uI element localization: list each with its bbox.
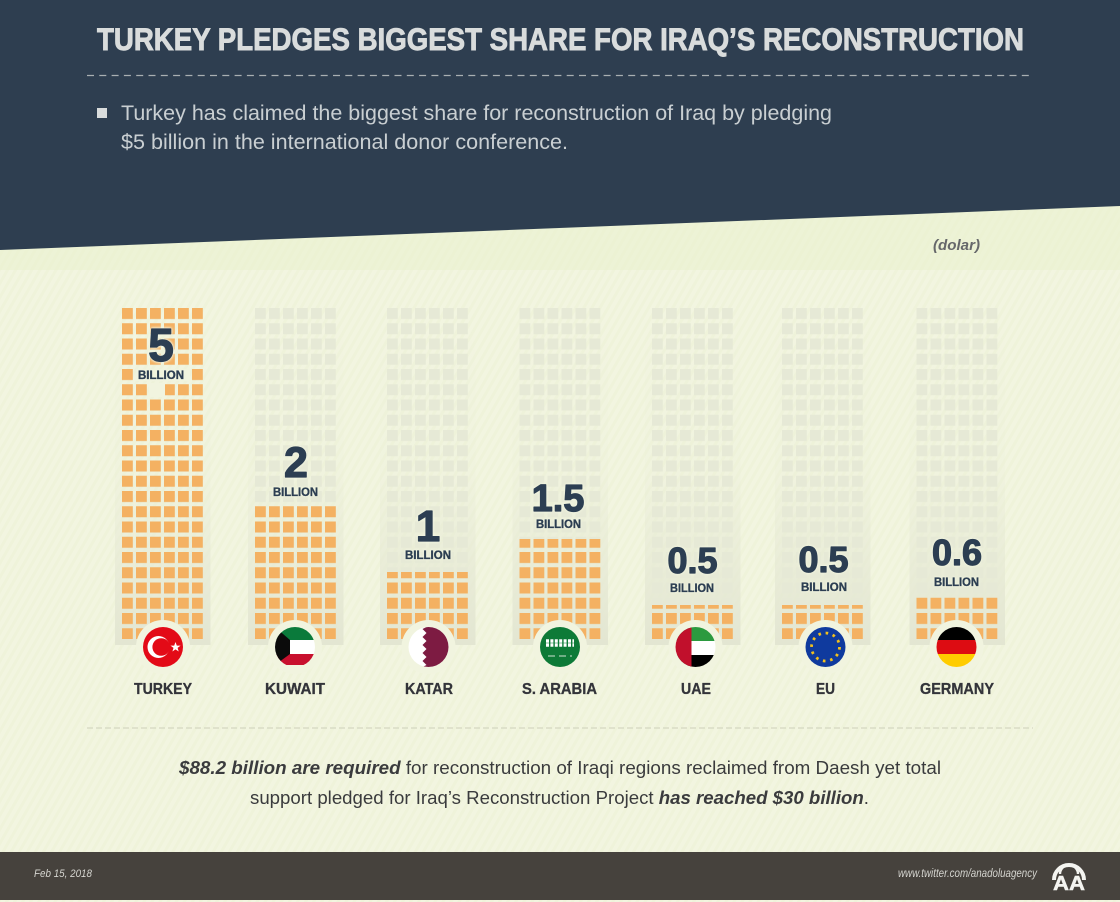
value: 0.6 — [932, 532, 982, 573]
bar: S. Arabia — [512, 296, 608, 645]
icon: EU flag — [798, 620, 852, 674]
summary text — [178, 758, 941, 808]
summary line 1: $88.2 billion are required for reconstruction of Iraqi regions reclaimed from Daesh yet total — [178, 758, 941, 778]
summary line 2: support pledged for Iraq’s Reconstruction Project has reached $30 billion . — [250, 788, 869, 808]
unit: BILLION — [536, 519, 581, 531]
label: Turkey: TURKEY — [134, 681, 193, 698]
icon: Germany flag — [930, 620, 984, 667]
icon: Anadolu Agency logo: AA — [1053, 873, 1085, 895]
bar: UAE — [645, 296, 740, 645]
value: 1 — [416, 502, 440, 551]
value: 0.5 — [667, 540, 718, 581]
label: Germany: GERMANY — [920, 681, 995, 698]
intro line 1: Turkey has claimed the biggest share for reconstruction of Iraq by pledging — [121, 102, 832, 125]
icon: Kuwait flag — [268, 620, 322, 665]
header band — [0, 0, 1120, 250]
footer bar — [0, 852, 1120, 900]
icon: Saudi Arabia flag — [533, 620, 587, 674]
bar: Kuwait — [248, 296, 344, 645]
bullet — [97, 108, 107, 118]
value: 0.5 — [798, 539, 849, 580]
unit: BILLION — [138, 370, 184, 382]
value: 2 — [284, 439, 308, 487]
unit note: (dolar) — [933, 237, 980, 254]
footer date: Feb 15, 2018 — [34, 868, 93, 880]
intro text — [97, 102, 832, 154]
bar: Germany — [910, 296, 1005, 645]
label: UAE: UAE — [681, 681, 711, 698]
icon: Katar flag — [402, 620, 456, 667]
label: EU: EU — [816, 681, 835, 698]
intro line 2: $5 billion in the international donor conference. — [121, 131, 568, 154]
label: Katar: KATAR — [405, 681, 453, 698]
unit: BILLION — [405, 550, 451, 562]
unit: BILLION — [273, 487, 318, 499]
bar: Katar — [380, 296, 476, 645]
bar: Turkey — [115, 296, 210, 645]
label: Kuwait: KUWAIT — [265, 681, 326, 698]
value: 5 — [148, 319, 174, 371]
label: S. Arabia: S. ARABIA — [522, 681, 597, 698]
unit: BILLION — [670, 583, 714, 595]
icon: Turkey flag — [136, 620, 190, 667]
unit: BILLION — [934, 577, 979, 589]
footer url: www.twitter.com/anadoluagency — [898, 868, 1038, 880]
unit: BILLION — [801, 582, 847, 594]
value: 1.5 — [532, 478, 584, 520]
bar: EU — [775, 296, 870, 645]
icon: Anadolu Agency logo — [1053, 865, 1085, 895]
icon: UAE flag — [668, 620, 722, 667]
